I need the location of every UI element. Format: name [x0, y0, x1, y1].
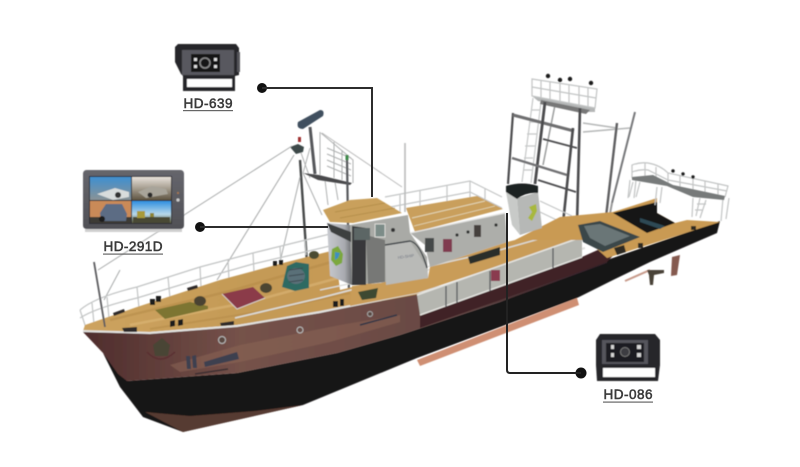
camera HD-639: [175, 44, 240, 91]
label HD-291D: HD-291D: [104, 239, 163, 254]
upper deck planks: [406, 196, 503, 232]
side deck rail: [320, 226, 585, 290]
wheelhouse cylinder: [327, 223, 352, 285]
wheelhouse: [350, 215, 428, 285]
rear mast ladder: [522, 98, 555, 183]
top lookout platform: [532, 74, 597, 114]
wheelhouse roof: [323, 198, 402, 223]
wheelhouse: HD-SHIP: [397, 253, 415, 260]
stern platform: [628, 163, 729, 221]
gunwale: [83, 248, 585, 333]
bow flagpole: [94, 262, 105, 327]
near side rail: [235, 232, 585, 318]
funnel: [506, 184, 542, 235]
callout line: HD-291D: [195, 222, 328, 232]
far rail: [385, 181, 572, 224]
label HD-639: HD-639: [184, 96, 232, 111]
dark sheer strip: [420, 240, 622, 328]
monitor HD-291D: [83, 170, 184, 232]
callout line: HD-086: [507, 213, 586, 378]
foredeck: fittings: [113, 251, 378, 332]
screen: rear car view: [90, 201, 131, 223]
callout line: HD-639: [257, 83, 372, 197]
rudder: [671, 255, 680, 276]
low deckhouse: [417, 237, 582, 315]
steel mast frame: [508, 102, 580, 233]
aft well: [613, 202, 675, 233]
foredeck: red hatch: [222, 287, 265, 309]
camera HD-086: [596, 334, 660, 381]
ship illustration: [80, 74, 729, 432]
hatch: [578, 221, 640, 252]
rust patches: [170, 315, 400, 372]
propeller: [625, 270, 664, 285]
long superstructure wall: [410, 213, 507, 267]
screen: silver car view: [132, 177, 171, 200]
screen: truck view: [90, 177, 131, 200]
aft deck planks: [515, 198, 720, 258]
fore mast, radar and platform: [290, 110, 402, 296]
aft fittings: [614, 226, 696, 255]
side deck planks: [350, 222, 587, 306]
foredeck planks: [83, 250, 420, 332]
hull rust band: [83, 255, 607, 381]
hatch interior: [584, 224, 630, 246]
hull forefoot rust: [145, 405, 303, 432]
bow far rail: [80, 234, 330, 328]
label HD-086: HD-086: [604, 387, 652, 402]
hull black lower band: [103, 221, 720, 432]
foredeck: winch: [282, 262, 309, 291]
screen: road view: [132, 201, 171, 223]
aft deck machinery: [640, 218, 665, 229]
aft mast and boom: [583, 112, 635, 251]
stays and bow rigging: [98, 143, 405, 300]
hull fittings: [147, 312, 397, 374]
keel: [417, 298, 579, 366]
